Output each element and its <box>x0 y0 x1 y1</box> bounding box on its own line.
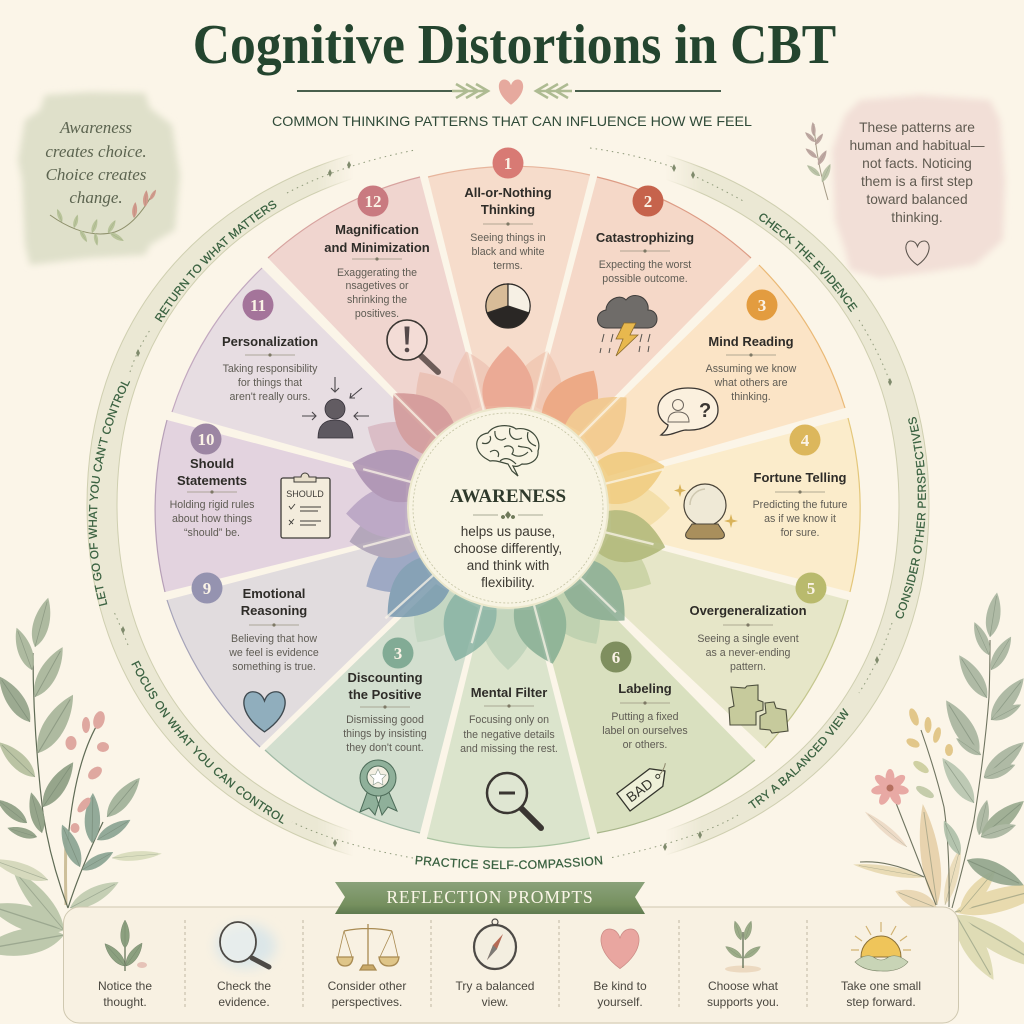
icon: leaf sprig <box>101 920 147 971</box>
icon: clipboard <box>281 473 330 538</box>
panel: reflection prompts: Be kind to <box>593 979 647 993</box>
panel: wedge 10 should statements: Should <box>190 456 234 471</box>
panel: wedge 7 mental filter: Focusing only on <box>469 714 549 726</box>
icon: storm cloud <box>597 295 657 356</box>
panel: wedge 6 labeling <box>538 583 755 833</box>
icon: BAD tag <box>617 759 676 811</box>
ring labels: CHECK THE EVIDENCE <box>759 214 858 312</box>
panel: reflection prompts: Notice the <box>98 979 152 993</box>
panel: wedge 3 mind reading: 3 <box>758 296 766 315</box>
panel: wedge 9 emotional reasoning: we feel is evidence <box>228 647 319 659</box>
panel: wedge 8 discounting the positive: the Positive <box>349 687 421 702</box>
callout: awareness note: creates choice. <box>45 142 147 161</box>
ring labels: FOCUS ON WHAT YOU CAN CONTROL <box>131 660 284 824</box>
panel: wedge 4 fortune telling <box>610 418 860 592</box>
panel: reflection prompts: Consider other <box>328 979 406 993</box>
panel: wedge 12 magnification and minimization: nsagetives or <box>345 280 409 292</box>
callout: patterns note: not facts. Noticing <box>862 156 972 171</box>
callout: patterns note: thinking. <box>891 210 943 225</box>
panel: wedge 11 personalization: aren't really ours. <box>230 391 310 403</box>
panel: wedge 1 all-or-nothing thinking: terms. <box>493 260 523 272</box>
icon: clipboard: SHOULD <box>286 489 324 499</box>
panel: reflection prompts: step forward. <box>846 995 916 1009</box>
panel: wedge 10 should statements: 10 <box>198 430 214 449</box>
panel: wedge 12 magnification and minimization: and Minimization <box>324 240 430 255</box>
panel: reflection prompts: Choose what <box>708 979 779 993</box>
botanical illustration: right <box>852 591 1024 985</box>
panel: wedge 4 fortune telling: Fortune Telling <box>754 470 847 485</box>
panel: wedge 3 mind reading: thinking. <box>731 391 771 403</box>
panel: wedge 6 labeling: label on ourselves <box>602 725 688 737</box>
panel: wedge 4 fortune telling: Predicting the future <box>753 499 848 511</box>
icon: crystal ball <box>674 484 738 539</box>
panel: wedge 7 mental filter: and missing the rest. <box>460 743 558 755</box>
decorative sprig beside note <box>804 122 833 200</box>
panel: wedge 8 discounting the positive: things by insisting <box>343 728 427 740</box>
icon: magnifier with minus <box>487 773 541 828</box>
icon: pink heart <box>601 929 639 969</box>
panel: wedge 5 overgeneralization: Seeing a single event <box>697 633 799 645</box>
panel: wedge 10 should statements: about how things <box>172 513 252 525</box>
panel: wedge 5 overgeneralization: as a never-ending <box>706 647 791 659</box>
callout: patterns note <box>832 95 1005 278</box>
center circle: awareness: flexibility. <box>481 575 535 590</box>
subtitle: COMMON THINKING PATTERNS THAT CAN INFLUENCE HOW WE FEEL <box>272 113 752 129</box>
panel: reflection prompts: supports you. <box>707 995 779 1009</box>
panel: wedge 2 catastrophizing: possible outcome. <box>602 273 688 285</box>
panel: wedge 12 magnification and minimization: 12 <box>364 192 382 211</box>
panel: wedge 7 mental filter <box>427 610 590 848</box>
panel: wedge 7 mental filter: the negative details <box>463 729 555 741</box>
panel: reflection prompts: view. <box>482 995 508 1009</box>
panel: wedge 11 personalization: Taking responsibility <box>223 363 318 375</box>
icon: sunrise <box>851 922 911 971</box>
icon: balance scales <box>337 924 399 970</box>
panel: wedge 9 emotional reasoning <box>167 537 432 747</box>
callout: awareness note: Choice creates <box>46 165 147 184</box>
panel: wedge 9 emotional reasoning: Believing that how <box>231 633 317 645</box>
callout: patterns note: toward balanced <box>866 192 968 207</box>
center circle: awareness: AWARENESS <box>450 486 566 507</box>
title: Cognitive Distortions in CBT <box>193 13 836 75</box>
botanical illustration: left <box>0 596 162 963</box>
panel: wedge 2 catastrophizing: 2 <box>644 192 652 211</box>
icon: magnifier with exclamation <box>387 320 438 372</box>
panel: wedge 2 catastrophizing <box>536 177 751 432</box>
panel: reflection prompts: perspectives. <box>332 995 402 1009</box>
panel: reflection prompts: Take one small <box>841 979 921 993</box>
panel: wedge 3 mind reading: Mind Reading <box>708 334 794 349</box>
panel: wedge 1 all-or-nothing thinking: Seeing things in <box>470 232 546 244</box>
callout: awareness note: change. <box>69 188 123 207</box>
callout: patterns note: These patterns are <box>859 120 975 135</box>
icon: broken puzzle pieces <box>729 685 788 733</box>
panel: wedge 8 discounting the positive: Dismissing good <box>346 714 424 726</box>
ring labels <box>88 200 926 870</box>
panel: wedge 10 should statements: Holding rigid rules <box>170 499 254 511</box>
panel: wedge 9 emotional reasoning: something is true. <box>232 661 316 673</box>
center circle: awareness: helps us pause, <box>461 524 555 539</box>
panel: wedge 4 fortune telling: as if we know it <box>764 513 836 525</box>
center circle: awareness: and think with <box>467 558 549 573</box>
panel: wedge 6 labeling: or others. <box>623 739 667 751</box>
banner: reflection prompts: REFLECTION PROMPTS <box>386 887 594 907</box>
panel: wedge 9 emotional reasoning: 9 <box>203 579 211 598</box>
ring dotted path and markers <box>114 148 892 858</box>
panel: wedge 1 all-or-nothing thinking <box>428 148 590 406</box>
center circle: awareness: choose differently, <box>454 541 562 556</box>
wedge spokes over petals <box>363 338 663 663</box>
panel: wedge 8 discounting the positive <box>265 584 478 833</box>
icon: seedling <box>724 920 762 972</box>
panel: wedge 3 mind reading <box>584 265 845 476</box>
icon: award ribbon <box>360 760 397 815</box>
center circle: awareness <box>408 408 608 608</box>
panel: wedge 11 personalization <box>172 268 431 478</box>
panel: wedge 10 should statements: “should” be. <box>184 527 240 539</box>
title ornament: line, sprigs and heart <box>297 80 721 105</box>
panel: wedge 6 labeling: 6 <box>612 648 620 667</box>
panel: reflection prompts: evidence. <box>218 995 270 1009</box>
panel: wedge 4 fortune telling: 4 <box>801 431 810 450</box>
panel: reflection prompts: Try a balanced <box>456 979 534 993</box>
panel: wedge 12 magnification and minimization: positives. <box>355 308 399 320</box>
callout: patterns note: them is a first step <box>861 174 973 189</box>
panel: wedge 5 overgeneralization <box>585 536 848 748</box>
callout: patterns note: human and habitual— <box>850 138 985 153</box>
icon: magnifier <box>216 922 276 968</box>
panel: wedge 12 magnification and minimization: Magnification <box>335 222 419 237</box>
panel: wedge 2 catastrophizing: Expecting the worst <box>599 259 691 271</box>
panel: wedge 12 magnification and minimization: shrinking the <box>347 294 407 306</box>
panel: wedge 1 all-or-nothing thinking: 1 <box>504 154 512 173</box>
panel: wedge 3 mind reading: what others are <box>713 377 788 389</box>
outer ring band <box>87 133 929 877</box>
panel: wedge 12 magnification and minimization: Exaggerating the <box>337 267 417 279</box>
panel: wedge 3 mind reading: Assuming we know <box>706 363 797 375</box>
panel: reflection prompts: thought. <box>103 995 147 1009</box>
icon: person with arrows <box>302 377 369 438</box>
icon: black and white circle <box>486 284 530 328</box>
ring labels: PRACTICE SELF-COMPASSION <box>415 856 602 870</box>
ring labels: RETURN TO WHAT MATTERS <box>154 200 276 322</box>
panel: wedge 6 labeling: Putting a fixed <box>611 711 679 723</box>
banner: reflection prompts <box>335 882 645 914</box>
panel: wedge 1 all-or-nothing thinking: All-or-Nothing <box>464 185 552 200</box>
panel: wedge 2 catastrophizing: Catastrophizing <box>596 230 694 245</box>
panel: wedge 10 should statements: Statements <box>177 473 247 488</box>
callout: awareness note: Awareness <box>59 118 132 137</box>
panel: wedge 1 all-or-nothing thinking: black and white <box>471 246 545 258</box>
panel: wedge 1 all-or-nothing thinking: Thinking <box>481 202 535 217</box>
panel: wedge 11 personalization: 11 <box>250 296 266 315</box>
callout: awareness note <box>18 92 180 265</box>
flower petals <box>344 345 671 671</box>
panel: wedge 11 personalization: Personalization <box>222 334 318 349</box>
panel: reflection prompts: Check the <box>217 979 271 993</box>
panel: wedge 9 emotional reasoning: Emotional <box>243 586 305 601</box>
panel: wedge 8 discounting the positive: Discounting <box>347 670 423 685</box>
panel: wedge 11 personalization: for things that <box>238 377 302 389</box>
icon: BAD tag: BAD <box>623 775 656 805</box>
panel: wedge 5 overgeneralization: Overgeneralization <box>689 603 807 618</box>
panel: wedge 5 overgeneralization: 5 <box>807 579 815 598</box>
panel: wedge 12 magnification and minimization <box>268 177 480 432</box>
panel: wedge 8 discounting the positive: they don't count. <box>346 742 424 754</box>
ring labels: LET GO OF WHAT YOU CAN'T CONTROL <box>88 381 130 606</box>
icon: speech bubble: ? <box>699 400 711 422</box>
icon: compass <box>474 919 516 969</box>
panel: wedge 10 should statements <box>155 420 406 592</box>
icon: speech bubble <box>658 388 718 435</box>
panel: wedge 9 emotional reasoning: Reasoning <box>241 603 307 618</box>
panel: wedge 4 fortune telling: for sure. <box>781 527 819 539</box>
ring labels: TRY A BALANCED VIEW <box>748 708 848 808</box>
panel: wedge 6 labeling: Labeling <box>618 681 672 696</box>
icon: brain <box>477 426 539 476</box>
ring labels: CONSIDER OTHER PERSPECTIVES <box>896 417 926 618</box>
panel: wedge 5 overgeneralization: pattern. <box>730 661 766 673</box>
panel: reflection prompts: yourself. <box>597 995 643 1009</box>
panel: wedge 8 discounting the positive: 3 <box>394 644 402 663</box>
panel: reflection prompts <box>64 907 958 1023</box>
icon: blue heart <box>244 692 285 732</box>
panel: wedge 7 mental filter: Mental Filter <box>471 685 547 700</box>
